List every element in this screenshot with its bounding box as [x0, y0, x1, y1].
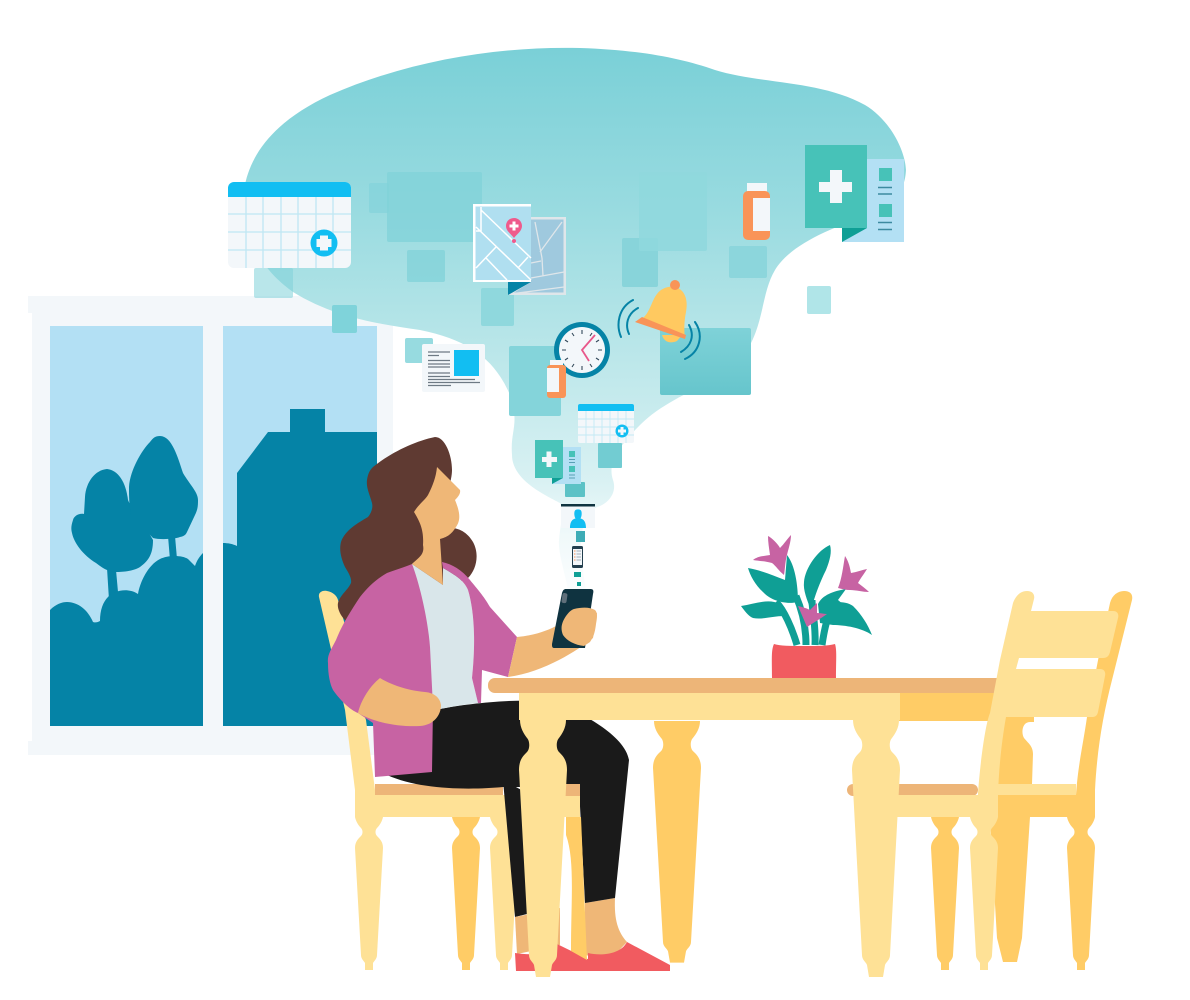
- front shoe: [588, 942, 670, 971]
- right chair rear parts: [847, 591, 1132, 970]
- hand: [562, 608, 597, 646]
- back table legs: [653, 693, 1034, 963]
- woman: [328, 437, 670, 971]
- phone camera: [561, 593, 568, 603]
- front foot: [585, 898, 627, 960]
- window: [28, 296, 398, 755]
- icon: potted plant: [741, 535, 872, 678]
- back shoe: [515, 944, 600, 971]
- icon: map: [473, 204, 566, 295]
- icon: orange bottle: [743, 183, 770, 240]
- icon: map pin: [506, 218, 522, 243]
- plant leaves: [741, 545, 872, 635]
- icon: small medical document: [535, 440, 581, 484]
- table front left leg: [519, 720, 567, 977]
- arm holding phone: [508, 613, 597, 677]
- phone: [552, 589, 593, 648]
- icon: clock: [554, 322, 610, 378]
- icon: newspaper: [422, 344, 485, 392]
- neck and face: [412, 467, 460, 585]
- icon: large calendar: [228, 182, 351, 268]
- table front right leg: [852, 720, 900, 977]
- table apron: [519, 693, 900, 720]
- plant pot: [772, 644, 836, 678]
- table top: [488, 678, 1008, 693]
- plant flowers: [753, 535, 869, 627]
- plant stems: [776, 596, 838, 645]
- floating squares: [254, 172, 831, 586]
- trees silhouette: [50, 436, 203, 726]
- right chair front: [895, 591, 1118, 970]
- shirt: [400, 564, 478, 710]
- house silhouette: [223, 409, 377, 726]
- icon: medical document: [805, 145, 904, 242]
- hair: [338, 437, 477, 630]
- thigh and front leg: [387, 701, 629, 903]
- cardigan: [328, 562, 517, 777]
- icon: small calendar: [578, 404, 634, 443]
- icon: doctor video card: [561, 504, 595, 528]
- icon: small bottle: [547, 360, 566, 398]
- thought cloud: [244, 48, 906, 592]
- icon: bell: [619, 280, 700, 359]
- icon: small phone list: [572, 546, 583, 568]
- left chair back and seat: [319, 591, 580, 970]
- resting forearm: [358, 678, 441, 726]
- chair rail overlap and sliver: [565, 784, 587, 960]
- back foot: [515, 908, 560, 954]
- back lower leg: [503, 780, 540, 917]
